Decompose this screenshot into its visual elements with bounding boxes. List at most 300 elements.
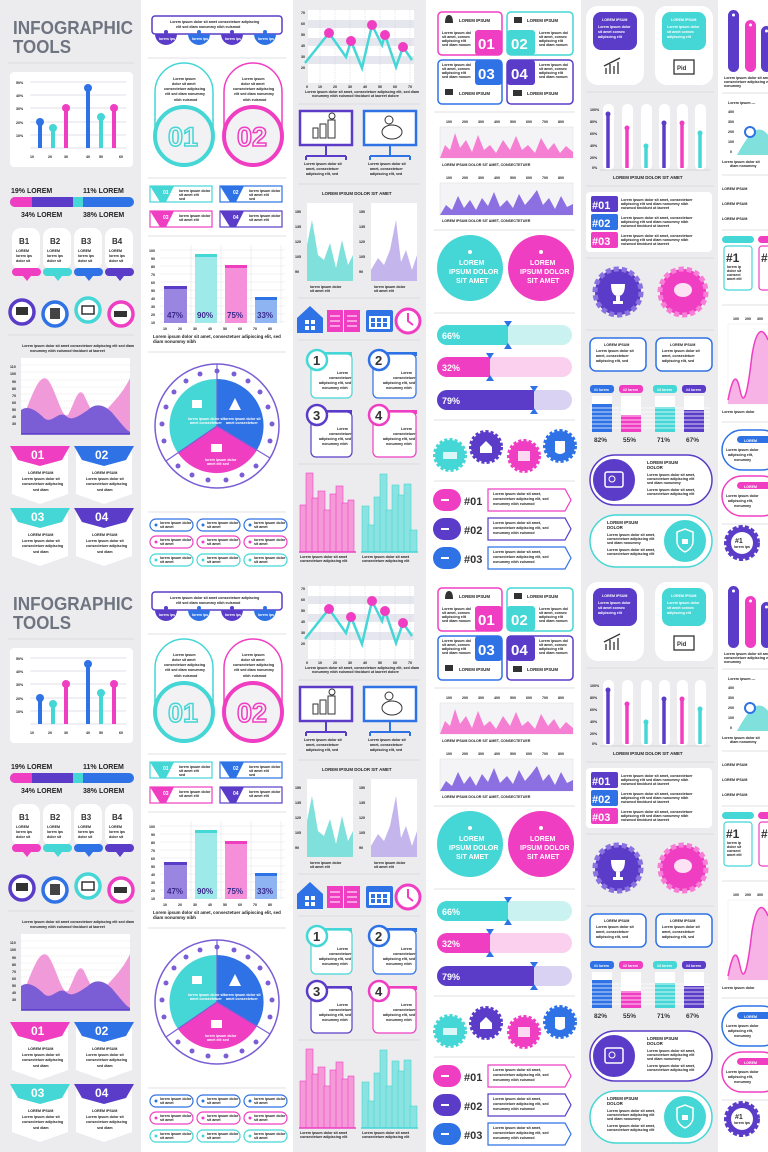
col3: line chart: nonummy nibh euismod tincidunt ut laoreet dolore [312,670,399,674]
icon boxes with people and piggy bank [300,687,416,752]
bar chart col2: 60 [151,857,155,861]
wheel pie chart: lorem ipsum dolor [205,458,237,462]
col3: line chart: 0 [306,85,308,89]
pink area chart: 400 [494,120,500,124]
pill buttons grid: sit amet [254,542,268,546]
col5: two rounded cards [586,6,713,85]
hashtag list #01-#03: euismod tincidunt ut laoreet [621,242,670,246]
numbered cards 1-4: nonummy nibh [386,442,412,446]
pentagon labels 01-04: 03 [31,1086,45,1100]
col6 pills: Lorem ipsum dolor [726,1024,759,1028]
pentagon labels 01-04: LOREM IPSUM [92,533,117,537]
icon row: house, book, calendar, clock [297,882,420,909]
two big circles: LOREM [530,260,555,267]
progress bars: 79% [442,972,460,982]
pill buttons grid: lorem ipsum dolor [160,521,192,525]
arch 02: elit sed diam nonummy [234,92,274,96]
arch 02: elit sed diam nonummy [234,668,274,672]
numbered arrow rows #01-#03 [433,1065,571,1145]
safe pill: LOREM IPSUM [647,1036,678,1041]
hashtag list #01-#03: #01 [592,200,610,212]
numbered arrow rows #01-#03: Lorem ipsum dolor sit amet, [493,521,541,525]
scalloped badge icons [435,1007,575,1047]
trapezoid labels 01-04: 04 [233,791,239,797]
trapezoid labels 01-04: sit amet elit [179,193,200,197]
title [13,18,133,57]
purple area chart: 500 [510,752,516,756]
B1-B4 cards: B2 [50,813,61,822]
area chart col1 [10,344,134,434]
col3: line chart: 20 [301,66,305,70]
shield pill: Lorem ipsum dolor sit amet, [607,1109,655,1113]
pentagon labels 01-04: 03 [31,510,45,524]
area chart col1: 40 [12,991,16,995]
bar chart col2: 90 [151,257,155,261]
arch 02 [224,639,282,741]
arch 01: dolor sit amet [172,658,196,662]
twin area charts: 150 [359,210,365,214]
numbered arrow rows #01-#03: #01 [464,496,482,508]
two big circles [437,235,574,301]
stacked percentage bars: #2 lorem [623,388,638,392]
pentagon labels 01-04: 04 [95,510,109,524]
#1 purple badge [726,527,758,559]
col3: line chart: 60 [301,598,305,602]
twin area charts: 90 [359,270,363,274]
pill buttons grid: sit amet [207,1118,221,1122]
numbered arrow rows #01-#03: #02 [464,525,482,537]
numbered arrow rows #01-#03: nonummy nibh euismod [493,531,535,535]
pill buttons grid: sit amet [254,1101,268,1105]
bar chart col2: 40 [208,327,212,331]
pentagon labels 01-04 [10,1022,134,1142]
bar chart col2: 80 [151,265,155,269]
pill buttons grid: lorem ipsum dolor [254,1097,286,1101]
trapezoid labels 01-04: lorem ipsum dolor [179,790,211,794]
icon boxes with people and piggy bank: amet, consectetuer [370,167,403,171]
bar chart col2: 90 [151,833,155,837]
bar chart col2: 60 [151,281,155,285]
area chart col1: 80 [12,387,16,391]
pill buttons grid: sit amet [254,560,268,564]
lollipop chart card: 50% [16,81,24,85]
vertical bar chart col5: 100% [590,108,600,112]
shield pill [590,515,712,567]
outlined text boxes: LOREM IPSUM [670,919,695,923]
pink line chart: Lorem ipsum dolor [722,410,755,414]
bar chart col2: 90% [197,311,213,320]
pentagon labels 01-04: LOREM IPSUM [28,471,53,475]
B1-B4 cards: lorem ips [109,254,125,258]
icon boxes with people and piggy bank: adipiscing elit, sed [306,172,338,176]
area chart col1: 70 [12,394,16,398]
col3: line chart: 50 [301,609,305,613]
col4: four numbered boxes: adipiscing elit [442,647,467,651]
col4: four numbered boxes: 02 [511,36,528,53]
#1 tag boxes: consect [727,849,741,853]
bar chart col2: 33% [257,887,273,896]
pill buttons grid: lorem ipsum dolor [254,521,286,525]
icon circles row [10,874,133,902]
wheel pie chart: amet elit sed [207,1038,229,1042]
numbered arrow rows #01-#03: consectetuer adipiscing elit, sed [493,1102,549,1106]
two big circles: IPSUM DOLOR [449,845,498,852]
pentagon labels 01-04: Lorem ipsum dolor sit [86,1053,125,1057]
trapezoid labels 01-04: sit amet elit [249,769,270,773]
lollipop chart card: 10% [16,710,24,714]
pentagon labels 01-04: 04 [95,1086,109,1100]
stacked percentage bars: 67% [686,1013,699,1020]
progress bars [437,321,572,414]
col6 text list [722,187,747,221]
numbered arrow rows #01-#03: nonummy nibh euismod [493,1136,535,1140]
progress bars: 66% [442,907,460,917]
col3: line chart: 70 [408,85,412,89]
pink area chart: 600 [526,120,532,124]
bar chart col2: 70 [151,849,155,853]
mini area chart with marker: Lorem ipsum dolor sit [722,160,761,164]
col6 text list: LOREM IPSUM [722,778,747,782]
col2: top timeline box: elit sed diam nonummy nibh euismod [176,601,240,605]
lollipop chart card: 30 [64,155,68,159]
trapezoid labels 01-04: lorem ipsum dolor [249,214,281,218]
col4: four numbered boxes: LOREM IPSUM [527,91,558,96]
col4: four numbered boxes: sed diam nonum [442,651,471,655]
numbered cards 1-4: adipiscing elit, sed [383,957,415,961]
outlined text boxes: amet, consectetuer [662,930,695,934]
wheel pie chart: amet consectetuer [226,997,258,1001]
pill buttons grid: sit amet [254,1118,268,1122]
twin area charts: 135 [359,801,365,805]
segmented percent bar: 11% LOREM [83,188,124,195]
numbered cards 1-4: Lorem [401,371,412,375]
#1 tag boxes: #1 [726,251,740,265]
col3: line chart: 50 [301,33,305,37]
pentagon labels 01-04: consectetuer adipiscing [22,544,63,548]
twin area charts: 90 [359,846,363,850]
mini area chart with marker: 300 [728,696,734,700]
vertical bar chart col5: 0% [592,742,598,746]
mini area chart with marker: 0 [730,150,732,154]
stacked percentage bars [590,385,710,444]
col5: two rounded cards: adipiscing elit [667,611,692,615]
col6 text list: LOREM IPSUM [722,217,747,221]
bar chart col2: 40 [208,903,212,907]
numbered arrow rows #01-#03 [433,489,571,569]
B1-B4 cards: lorem ips [47,830,63,834]
stacked percentage bars: 71% [657,1013,670,1020]
purple area chart: 200 [462,752,468,756]
col4: four numbered boxes: LOREM IPSUM [459,594,490,599]
safe pill: consectetuer adipiscing elit [647,477,695,481]
pill buttons grid: lorem ipsum dolor [160,1114,192,1118]
twin area charts [295,191,417,293]
outlined text boxes: amet, consectetuer [596,354,629,358]
shield pill: DOLOR [607,1101,624,1106]
stacked percentage bars: #1 lorem [594,964,609,968]
progress bars: 32% [442,939,460,949]
twin area charts: 150 [359,786,365,790]
B1-B4 cards: B1 [19,237,30,246]
pill buttons grid: lorem ipsum dolor [160,556,192,560]
numbered arrow rows #01-#03: consectetuer adipiscing elit, sed [493,1131,549,1135]
shield pill: consectetuer adipiscing elit [607,552,655,556]
col5: two rounded cards: sit amet consec [667,30,694,34]
safe pill [590,1031,712,1081]
pink area chart: 100 [446,696,452,700]
icon boxes with people and piggy bank: Lorem ipsum dolor sit [368,738,407,742]
stacked percentage bars: #3 lorem [657,388,672,392]
safe pill: LOREM IPSUM [647,460,678,465]
wheel pie chart: lorem ipsum dolor sit [188,993,225,997]
hashtag list #01-#03: adipiscing elit sed diam nonummy nibh [621,220,688,224]
col3: line chart: Lorem ipsum dolor sit amet, consectetuer adipiscing elit, sed diam [305,90,419,94]
twin area charts: lorem ipsum dolor [310,861,342,865]
col4: four numbered boxes: sed diam nonum [442,619,471,623]
vertical bar chart col5: 80% [590,696,598,700]
bar chart col2: 20 [178,327,182,331]
pink line chart: Lorem ipsum dolor [722,986,755,990]
pentagon labels 01-04: LOREM IPSUM [92,1109,117,1113]
col4: four numbered boxes: 01 [478,612,495,629]
arch 02: dolor sit amet [241,658,265,662]
col4: four numbered boxes: LOREM IPSUM [527,667,558,672]
numbered cards 1-4: nonummy nibh [322,1018,348,1022]
area chart col1 [10,920,134,1010]
col3: line chart: 40 [363,85,367,89]
col4: four numbered boxes: LOREM IPSUM [527,594,558,599]
pink area chart: 800 [558,120,564,124]
col4: four numbered boxes: sit amet, consec [539,643,567,647]
lollipop chart card: 50 [99,731,103,735]
two big circles: IPSUM DOLOR [449,269,498,276]
vertical bar chart col5: 0% [592,166,598,170]
col4: four numbered boxes: 03 [478,642,495,659]
col4: four numbered boxes: 04 [511,66,528,83]
numbered cards 1-4: consectetuer [393,1008,416,1012]
B1-B4 cards: lorem ips [109,830,125,834]
hashtag list #01-#03: adipiscing elit sed diam nonummy nibh [621,796,688,800]
area chart col1: 100 [10,948,16,952]
pink line chart [722,317,768,414]
col3: line chart: 30 [348,661,352,665]
wheel pie chart: lorem ipsum dolor sit [188,417,225,421]
area chart col1: 70 [12,970,16,974]
col4: four numbered boxes: adipiscing elit [539,71,564,75]
col4: four numbered boxes: sed diam nonum [539,651,568,655]
numbered cards 1-4: consectetuer [393,432,416,436]
column 1 background [0,0,141,576]
wheel pie chart [155,940,279,1064]
B1-B4 cards: lorem ips [16,830,32,834]
segmented percent bar: 38% LOREM [83,788,124,795]
shield pill: LOREM IPSUM [607,520,638,525]
col4: four numbered boxes: 02 [511,612,528,629]
wheel pie chart: amet consectetuer [190,997,222,1001]
col4: four numbered boxes: sit amet, consec [442,35,470,39]
col6: tall capsule bars: nonummy [724,660,741,664]
col3: line chart: 70 [301,587,305,591]
pill buttons grid: lorem ipsum dolor [160,538,192,542]
hashtag list #01-#03: adipiscing elit sed diam nonummy nibh [621,814,688,818]
two big circles: SIT AMET [527,278,560,285]
hashtag list #01-#03: euismod tincidunt ut laoreet [621,818,670,822]
twin area charts: 90 [295,270,299,274]
trapezoid labels 01-04: 03 [163,215,169,221]
pill buttons grid: sit amet [207,1101,221,1105]
pill buttons grid: sit amet [207,1136,221,1140]
twin area charts: 135 [295,225,301,229]
pill buttons grid: lorem ipsum dolor [207,538,239,542]
numbered cards 1-4: adipiscing elit, sed [319,381,351,385]
col6 pills: LOREM [744,485,757,489]
B1-B4 cards: lorem ips [47,254,63,258]
shield pill: DOLOR [607,525,624,530]
numbered cards 1-4: nonummy nibh [386,386,412,390]
numbered cards 1-4: adipiscing elit, sed [319,437,351,441]
shield pill: Lorem ipsum dolor sit amet, [607,1124,655,1128]
pill buttons grid: sit amet [160,525,174,529]
pink area chart [440,120,573,167]
bottom half: repeated infographic tools sheet [0,576,768,1152]
col4: four numbered boxes: Lorem ipsum dol [539,63,568,67]
B1-B4 cards [12,228,134,281]
lollipop chart card [10,72,133,167]
bar chart col2: 60 [238,327,242,331]
bar chart col2: 20 [178,903,182,907]
B1-B4 cards: B3 [81,237,92,246]
wheel pie chart: lorem ipsum dolor sit [224,417,261,421]
col4: four numbered boxes: adipiscing elit [539,647,564,651]
pentagon labels 01-04: consectetuer adipiscing [22,1058,63,1062]
pill buttons grid: sit amet [207,542,221,546]
pill buttons grid: lorem ipsum dolor [207,1097,239,1101]
hashtag list #01-#03: euismod tincidunt ut laoreet [621,800,670,804]
area chart col1: 110 [10,365,16,369]
pentagon labels 01-04: consectetuer adipiscing [86,482,127,486]
vertical bar chart col5: 60% [590,708,598,712]
col6 text list: LOREM IPSUM [722,793,747,797]
#1 tag boxes [722,236,768,290]
pentagon labels 01-04: consectetuer adipiscing [22,482,63,486]
histograms pink and cyan: Lorem ipsum dolor sit amet [362,1131,410,1135]
purple area chart: 100 [446,752,452,756]
lollipop chart card: 40% [16,670,24,674]
outlined text boxes: adipiscing elit, sed [662,935,694,939]
area chart col1: 100 [10,372,16,376]
safe pill [590,455,712,505]
pentagon labels 01-04: 02 [95,448,109,462]
icon boxes with people and piggy bank: adipiscing elit, sed [370,172,402,176]
mini area chart with marker: 400 [728,110,734,114]
two big circles: IPSUM DOLOR [520,269,569,276]
col6 pills: adipiscing elit, [728,453,753,457]
stacked percentage bars: 67% [686,437,699,444]
#1 tag boxes: lorem ip [727,265,742,269]
bar chart col2: 33% [257,311,273,320]
twin area charts: 120 [295,816,301,820]
col4: four numbered boxes: LOREM IPSUM [459,667,490,672]
trophy and chat badges [595,269,706,315]
pill buttons grid: sit amet [160,1101,174,1105]
area chart col1: 80 [12,963,16,967]
pill buttons grid: lorem ipsum dolor [207,521,239,525]
col4: four numbered boxes: LOREM IPSUM [527,18,558,23]
twin area charts: sit amet elit [374,865,395,869]
bar chart col2: 90% [197,887,213,896]
col4: four numbered boxes: sit amet, consec [442,67,470,71]
col6 pills: LOREM [744,439,757,443]
bar chart col2: Lorem ipsum dolor sit amet, consectetuer adipiscing elit, sed [153,910,281,915]
pill buttons grid: sit amet [160,1118,174,1122]
B1-B4 cards: LOREM [109,249,122,253]
segmented percent bar: 19% LOREM [11,764,52,771]
arch 01: dolor sit amet [172,82,196,86]
pink area chart: 700 [542,696,548,700]
col3: line chart: 10 [318,661,322,665]
col4: four numbered boxes: Lorem ipsum dol [539,607,568,611]
col4: four numbered boxes: sit amet, consec [539,611,567,615]
histograms pink and cyan: Lorem ipsum dolor sit amet [300,1131,348,1135]
col5: two rounded cards: Pid [677,66,687,72]
purple area chart [440,752,573,799]
numbered arrow rows #01-#03: Lorem ipsum dolor sit amet, [493,550,541,554]
arch 02: 02 [237,698,267,728]
segmented percent bar [10,764,134,795]
hashtag list #01-#03: euismod tincidunt ut laoreet [621,224,670,228]
numbered cards 1-4: adipiscing elit, sed [383,437,415,441]
arch 02: dolor sit amet [241,82,265,86]
numbered cards 1-4: nonummy nibh [386,962,412,966]
wheel pie chart: lorem ipsum dolor sit [224,993,261,997]
numbered arrow rows #01-#03: Lorem ipsum dolor sit amet, [493,492,541,496]
bar chart col2: 10 [151,897,155,901]
wheel pie chart [155,364,279,488]
hashtag list #01-#03: #01 [592,776,610,788]
bar chart col2: 80 [151,841,155,845]
outlined text boxes: LOREM IPSUM [604,919,629,923]
#1 purple badge: lorem ips [734,1121,750,1125]
B1-B4 cards: B1 [19,813,30,822]
col6 pills: Lorem ipsum dolor [726,494,759,498]
col5: two rounded cards: LOREM IPSUM [602,18,627,22]
arch 01: elit sed diam nonummy [165,668,205,672]
two big circles: SIT AMET [456,854,489,861]
B1-B4 cards: lorem ips [78,254,94,258]
#1 tag boxes: dolor sit [727,845,742,849]
bar chart col2: 47% [167,311,183,320]
numbered arrow rows #01-#03: #01 [464,1072,482,1084]
col3: line chart: 60 [393,85,397,89]
col5: two rounded cards: sit amet consec [598,30,625,34]
icon boxes with people and piggy bank: Lorem ipsum dolor sit [304,738,343,742]
pentagon labels 01-04: sed diam [33,550,49,554]
col4: four numbered boxes: Lorem ipsum dol [539,639,568,643]
mini area chart with marker: 100 [728,140,734,144]
lollipop chart card: 60 [119,731,123,735]
B1-B4 cards: B4 [112,813,123,822]
mini area chart with marker: 200 [728,130,734,134]
numbered cards 1-4: consectetuer [393,376,416,380]
mini area chart with marker: Lorem ipsum dolor sit [722,736,761,740]
mini area chart with marker [722,101,768,168]
#1 purple badge: lorem ips [734,545,750,549]
col3: line chart: 40 [301,620,305,624]
col4: four numbered boxes: Lorem ipsum dol [442,63,471,67]
col3: line chart: 20 [333,661,337,665]
purple area chart: 600 [526,176,532,180]
bar chart col2: 75% [227,887,243,896]
